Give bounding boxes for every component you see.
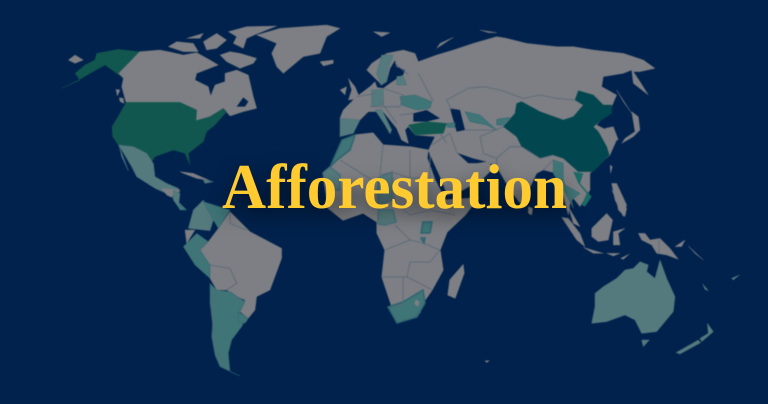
Africa borders [340, 145, 455, 307]
countries layer [62, 25, 739, 376]
Eurasian borders [357, 63, 575, 170]
Africa [323, 133, 478, 323]
China [503, 91, 612, 172]
Oceania and Indonesia [485, 190, 739, 363]
South America [173, 190, 282, 376]
title: Afforestation [222, 151, 567, 222]
continental Europe block [340, 73, 440, 143]
North America and Greenland [62, 25, 360, 210]
Eurasia [340, 30, 655, 217]
Southeast Asia teal countries [553, 160, 570, 198]
Africa teal countries [388, 290, 425, 323]
Sweden, Germany, Ukraine and other European teal countries [377, 55, 393, 85]
